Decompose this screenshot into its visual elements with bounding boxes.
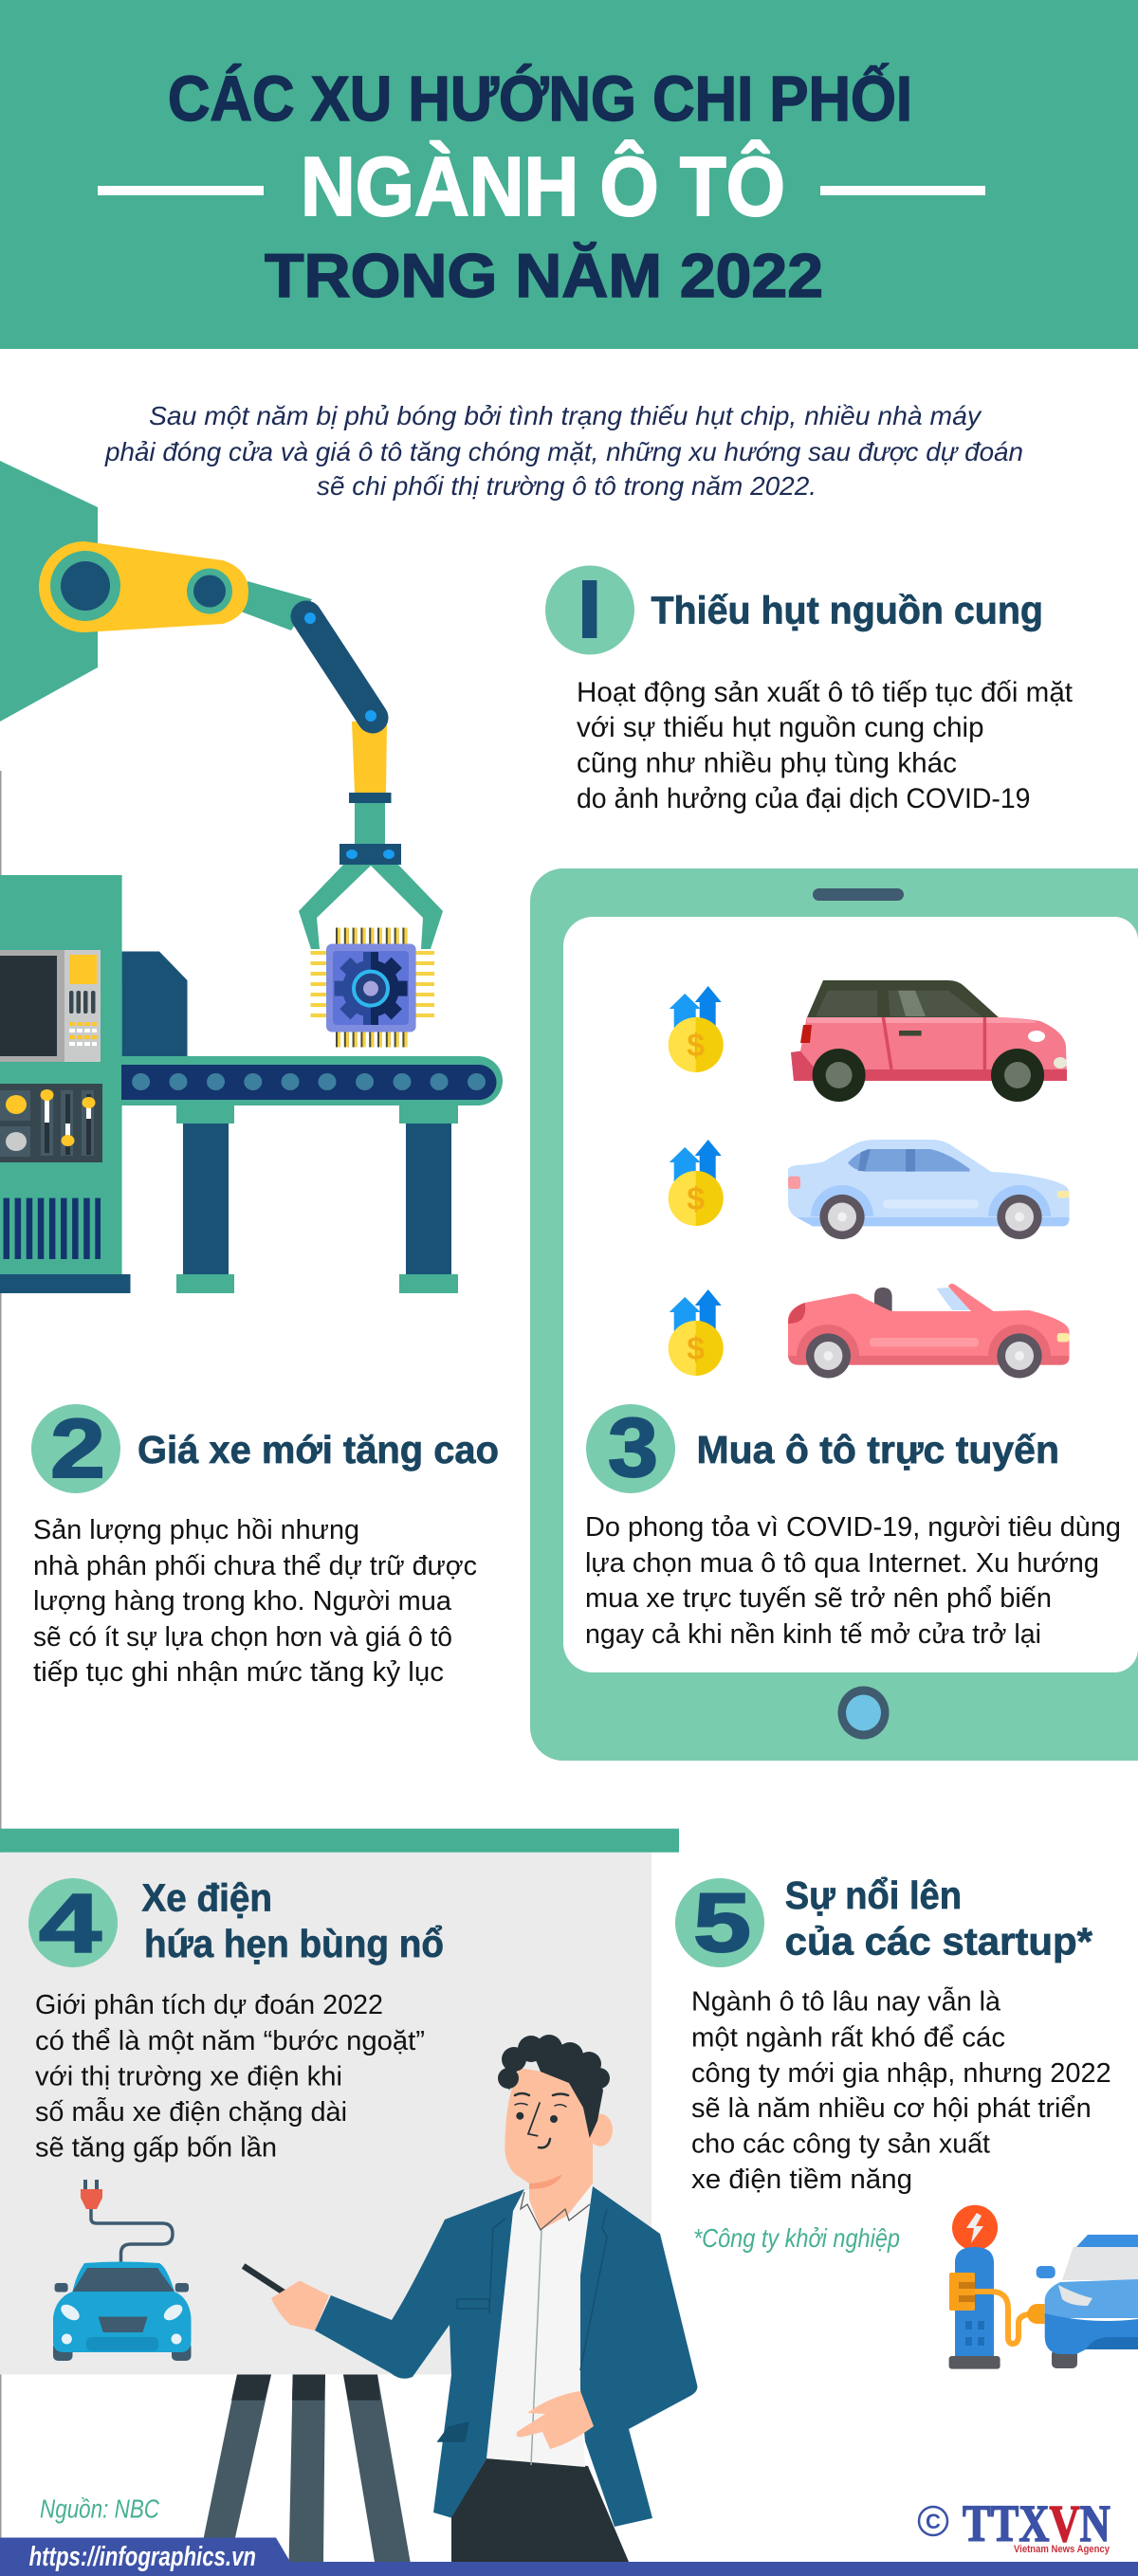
logo tagline: Vietnam News Agency [1014, 2544, 1110, 2555]
heading 2: Giá xe mới tăng cao [138, 1428, 499, 1471]
car: red hatchback [791, 980, 1067, 1102]
title rule right [820, 186, 985, 195]
number badge 5: 5 [693, 1875, 751, 1969]
cable [91, 2207, 173, 2264]
board panel [0, 1853, 652, 2374]
icon: coin and arrows 1 [669, 986, 724, 1072]
logo wordmark: TTXVN [963, 2494, 1110, 2552]
footer bar [0, 2537, 1138, 2576]
body 2: nhà phân phối chưa thể dự trữ được [33, 1551, 477, 1581]
copyright mark [919, 2507, 947, 2535]
illustration: robot arm [0, 461, 443, 949]
body 5: cho các công ty sản xuất [691, 2129, 990, 2160]
section 3 [585, 1400, 1121, 1650]
body 2: tiếp tục ghi nhận mức tăng kỷ lục [33, 1657, 444, 1688]
facial features [515, 2093, 568, 2147]
arm link blue [306, 616, 373, 718]
easel legs [201, 2374, 411, 2562]
body 5: Ngành ô tô lâu nay vẫn là [691, 1986, 1001, 2018]
charging unit [949, 2273, 975, 2311]
number badge 2 [31, 1401, 120, 1495]
heading 4: Xe điện [142, 1876, 272, 1920]
body 3: mua xe trực tuyến sẽ trở nên phổ biến [585, 1583, 1052, 1614]
heading 5 [785, 1873, 1092, 1964]
heading 3: Mua ô tô trực tuyến [696, 1428, 1059, 1471]
jacket details [438, 2209, 607, 2441]
machine body [0, 875, 122, 1274]
number badge 3 [586, 1400, 675, 1494]
charging bolt badge [952, 2205, 998, 2251]
pants [451, 2458, 629, 2562]
number badge 4: 4 [39, 1876, 101, 1970]
heading 5: Sự nổi lên [785, 1873, 962, 1917]
section 2 [31, 1401, 499, 1688]
heading 1: Thiếu hụt nguồn cung [651, 589, 1043, 632]
body 4: với thị trường xe điện khi [35, 2062, 342, 2092]
icon: plug-in electric car [53, 2180, 192, 2361]
icon: microchip with gear [319, 936, 425, 1039]
body 3 [585, 1512, 1121, 1650]
intro text: phải đóng cửa và giá ô tô tăng chóng mặt, những xu hướng sau được dự đoán [104, 437, 1023, 466]
board top bar [0, 1829, 679, 1853]
body 1 [577, 677, 1074, 814]
body 2: Sản lượng phục hồi nhưng [33, 1515, 359, 1545]
section 5 [675, 1873, 1111, 2253]
hair [498, 2035, 610, 2138]
body 4: sẽ tăng gấp bốn lần [35, 2133, 277, 2164]
body 3: ngay cả khi nền kinh tế mở cửa trở lại [585, 1619, 1041, 1650]
phone frame [530, 868, 1138, 1761]
body 2 [33, 1515, 477, 1688]
conveyor rollers [132, 1073, 486, 1090]
conveyor legs [176, 1105, 234, 1124]
header banner [0, 0, 1138, 349]
shirt collar [521, 2192, 590, 2230]
heading 5: của các startup* [785, 1920, 1092, 1964]
number badge 1 [545, 565, 634, 654]
intro text [104, 401, 1023, 501]
title line 3: TRONG NĂM 2022 [265, 241, 823, 310]
icon: coin and arrows 3 [669, 1289, 724, 1376]
section 4 board [0, 1829, 679, 2562]
machine keypad [64, 950, 101, 1062]
resting hand [517, 2391, 594, 2449]
section 4 [28, 1876, 444, 2164]
footnote: *Công ty khởi nghiệp [693, 2223, 900, 2253]
arm yellow lower [352, 722, 387, 793]
heading 4: hứa hẹn bùng nổ [144, 1922, 444, 1965]
section 1 [545, 565, 1074, 814]
number badge 5 [675, 1875, 764, 1969]
charging cable [975, 2292, 1028, 2344]
body 4 [35, 1990, 425, 2164]
shirt placket [531, 2230, 541, 2465]
icon: coin and arrows 2 [669, 1140, 724, 1226]
body 4: Giới phân tích dự đoán 2022 [35, 1990, 383, 2020]
arm upper yellow [39, 541, 248, 632]
body 2: sẽ có ít sự lựa chọn hơn và giá ô tô [33, 1622, 452, 1653]
intro text: sẽ chi phối thị trường ô tô trong năm 2022. [317, 471, 817, 501]
body 1: Hoạt động sản xuất ô tô tiếp tục đối mặt [577, 677, 1074, 708]
number badge 3: 3 [608, 1400, 658, 1494]
copyright mark: C [926, 2510, 941, 2533]
title line 1: CÁC XU HƯỚNG CHI PHỐI [168, 63, 912, 135]
machine screen [0, 950, 64, 1062]
footer url: https://infographics.vn [29, 2542, 256, 2572]
icon: EV charging station [949, 2205, 1045, 2369]
left edge rule [0, 771, 2, 2538]
title line 2: NGÀNH Ô TÔ [301, 139, 785, 233]
agency logo [919, 2494, 1110, 2555]
illustration: presenter [244, 2035, 697, 2562]
number badge 2: 2 [50, 1401, 105, 1495]
body 5: xe điện tiềm năng [691, 2165, 912, 2195]
jacket left with pointing arm [315, 2189, 524, 2518]
neck and face [505, 2068, 613, 2230]
car: blue coupe [788, 1140, 1070, 1239]
pointing hand and pen [244, 2266, 329, 2330]
body 2: lượng hàng trong kho. Người mua [33, 1586, 452, 1617]
body 1: với sự thiếu hụt nguồn cung chip [577, 712, 984, 743]
plug [81, 2180, 102, 2209]
machine vents [4, 1198, 101, 1259]
illustration: conveyor belt [121, 1056, 503, 1293]
shirt [486, 2184, 593, 2467]
heading 4 [142, 1876, 444, 1965]
illustration: machine [0, 875, 188, 1293]
conveyor belt body [121, 1056, 503, 1105]
arm base [0, 461, 98, 722]
body 4: có thể là một năm “bước ngoặt” [35, 2026, 425, 2056]
charging post [955, 2247, 994, 2356]
jacket right [580, 2186, 697, 2527]
phone home button [838, 1686, 890, 1739]
body 3: lựa chọn mua ô tô qua Internet. Xu hướng [585, 1548, 1099, 1579]
gripper [349, 793, 391, 803]
body 5: sẽ là năm nhiều cơ hội phát triển [691, 2093, 1092, 2124]
body 5: công ty mới gia nhập, nhưng 2022 [691, 2058, 1111, 2089]
body 4: số mẫu xe điện chặng dài [35, 2096, 347, 2128]
phone speaker [813, 888, 904, 901]
machine side block [122, 952, 188, 1058]
arm link teal [241, 581, 312, 630]
body 3: Do phong tỏa vì COVID-19, người tiêu dùng [585, 1512, 1121, 1543]
machine control panel [0, 1084, 102, 1162]
icon: EV car front [1037, 2235, 1138, 2368]
body 1: do ảnh hưởng của đại dịch COVID-19 [577, 783, 1030, 814]
body 1: cũng như nhiều phụ tùng khác [577, 748, 957, 779]
title rule left [98, 186, 264, 195]
body 5 [691, 1986, 1111, 2195]
body 5: một ngành rất khó để các [691, 2022, 1005, 2053]
number badge 4 [28, 1876, 118, 1970]
source note: Nguồn: NBC [40, 2494, 160, 2524]
car: red convertible [788, 1284, 1070, 1379]
intro text: Sau một năm bị phủ bóng bởi tình trạng thiếu hụt chip, nhiều nhà máy [149, 401, 982, 430]
